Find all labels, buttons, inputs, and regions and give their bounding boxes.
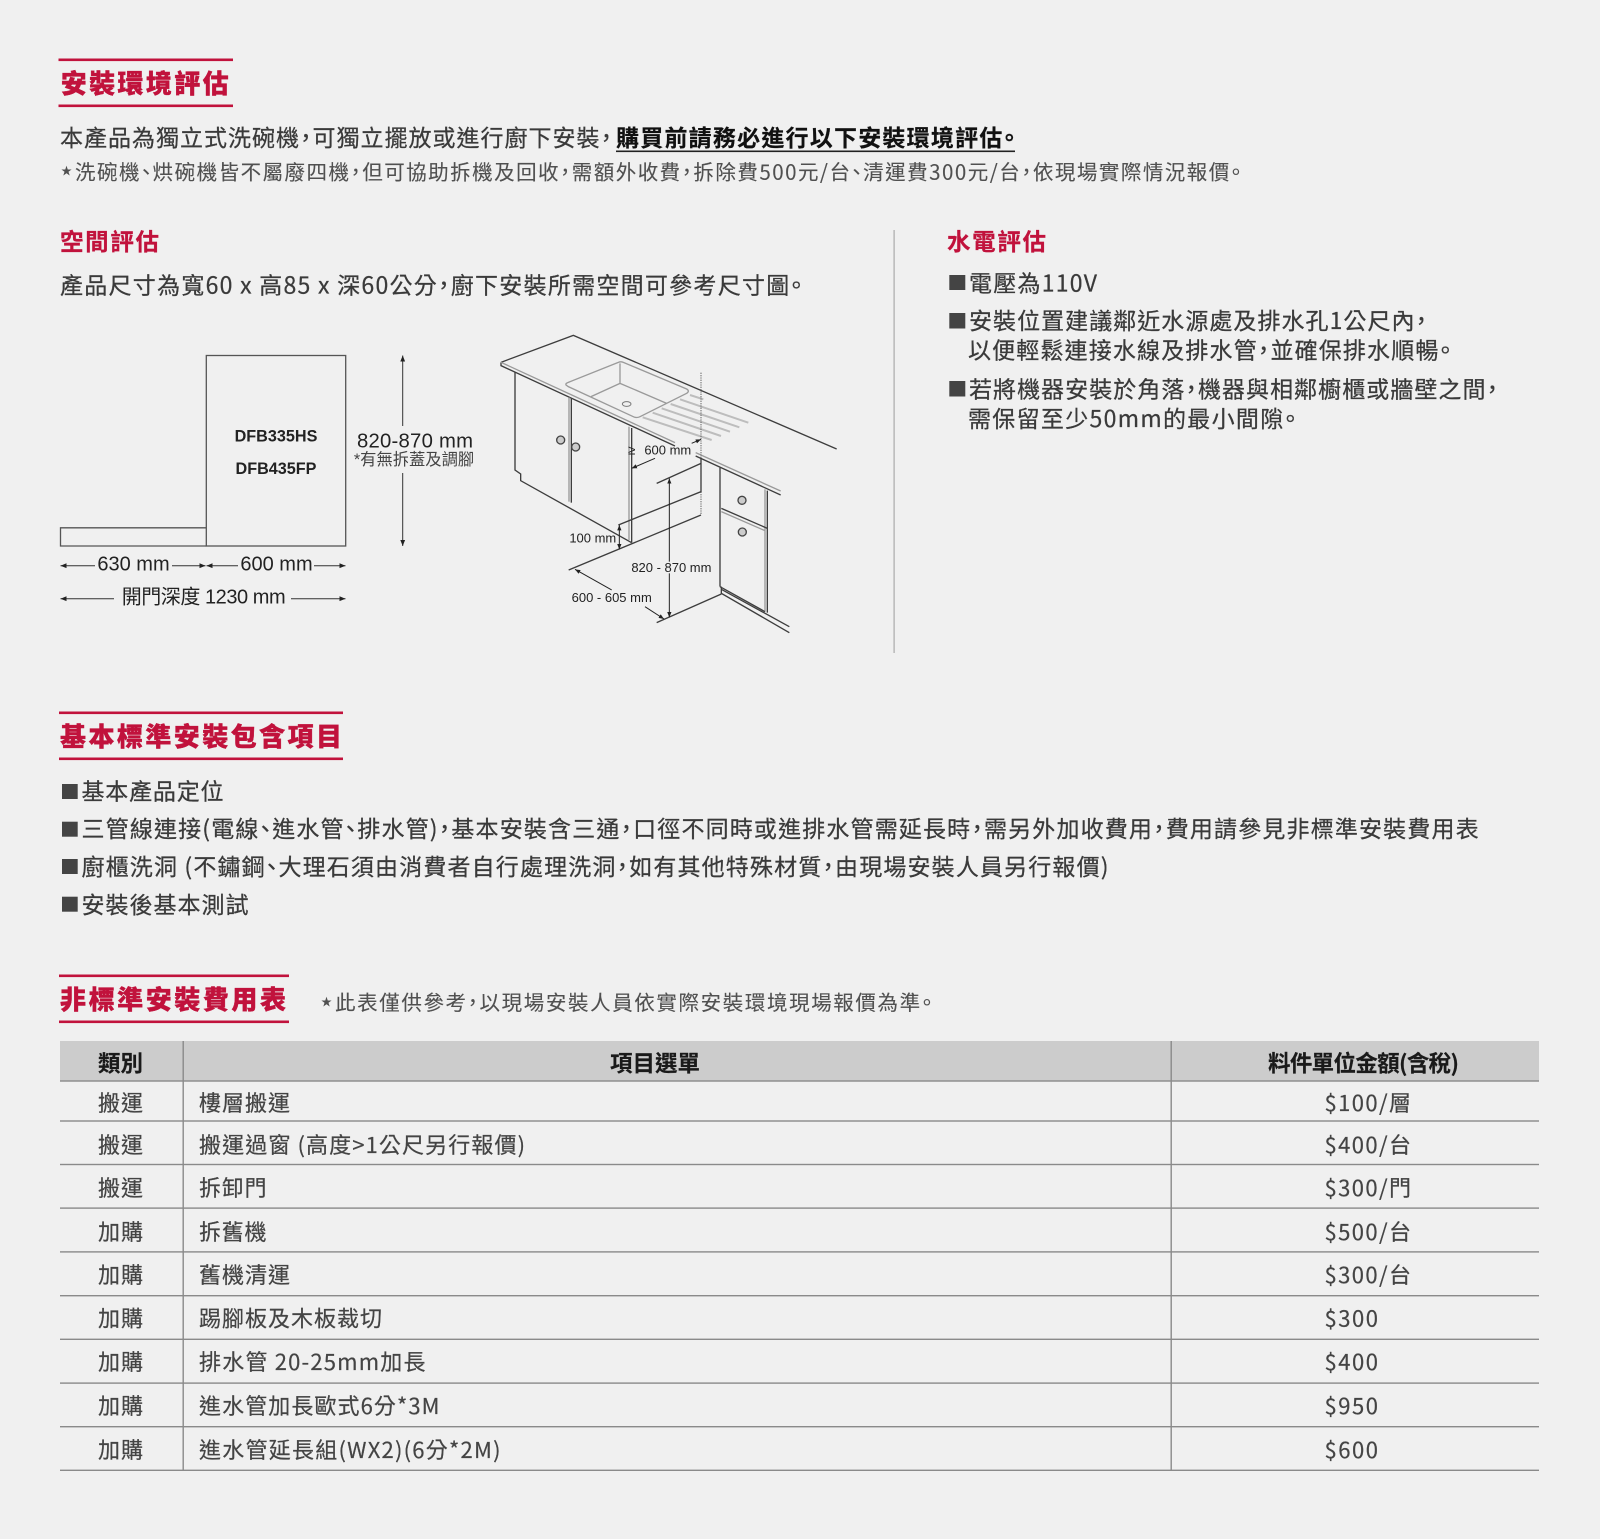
- panel: water and power assessment: [894, 223, 1498, 653]
- heading: space assessment: 空間評估: [60, 223, 159, 257]
- row: door removal: $300/門: [1324, 1171, 1411, 1203]
- row: door removal: 搬運: [98, 1171, 143, 1203]
- row: remove old machine: $500/台: [1324, 1215, 1411, 1247]
- row: window carrying: $400/台: [1324, 1128, 1411, 1160]
- row: remove old machine: 加購: [98, 1215, 143, 1247]
- item: cabinet hole cutting: 廚櫃洗洞 (不鏽鋼、大理石須由消費者自行處理洗洞，如有其他特殊材質，由現場安裝人員另行報價): [82, 848, 1108, 882]
- panel: space assessment: [60, 223, 837, 633]
- diagram: under-counter isometric cabinet: 820 - 870 mm: [631, 560, 711, 575]
- panel: installation environment intro: [58, 58, 1241, 186]
- row: window carrying: [98, 1128, 1411, 1160]
- row: floor carrying: 搬運: [98, 1086, 143, 1118]
- intro text: 本產品為獨立式洗碗機，可獨立擺放或進行廚下安裝，: [60, 119, 612, 153]
- water source distance item: 以便輕鬆連接水線及排水管，並確保排水順暢。: [968, 332, 1451, 366]
- panel: basic standard installation: [59, 712, 1479, 920]
- row: drain pipe extension: 排水管 20-25mm加長: [199, 1345, 426, 1377]
- diagram: front clearance dimensions: 開門深度 1230 mm: [122, 586, 286, 608]
- row: old machine disposal: [98, 1258, 1411, 1290]
- table note: 此表僅供參考，以現場安裝人員依實際安裝環境現場報價為準。: [335, 986, 932, 1016]
- row: kick plate cutting: [98, 1302, 1378, 1334]
- item: three line connection: 三管線連接(電線、進水管、排水管)，基本安裝含三通，口徑不同時或進排水管需延長時，需另外加收費用，費用請參見非標準安裝費用表: [82, 810, 1479, 844]
- corner clearance item: 若將機器安裝於角落，機器與相鄰櫥櫃或牆壁之間，: [969, 370, 1498, 404]
- table header row: 類別: [98, 1046, 143, 1078]
- water source distance item: [949, 302, 1451, 366]
- heading: non-standard installation fees: 非標準安裝費用表: [60, 980, 286, 1017]
- row: old machine disposal: 舊機清運: [199, 1258, 290, 1290]
- row: inlet pipe extension set: [98, 1433, 1378, 1465]
- row: drain pipe extension: 加購: [98, 1345, 143, 1377]
- row: inlet pipe extension set: 進水管延長組(WX2)(6分*2M): [199, 1433, 500, 1465]
- table grid lines: [60, 1041, 1539, 1471]
- row: kick plate cutting: $300: [1324, 1302, 1378, 1334]
- row: window carrying: 搬運: [98, 1128, 143, 1160]
- row: drain pipe extension: $400: [1324, 1345, 1378, 1377]
- diagram: front clearance dimensions: *有無拆蓋及調腳: [354, 451, 474, 469]
- diagram: under-counter isometric cabinet: 100 mm: [569, 530, 616, 545]
- heading: basic standard installation items: 基本標準安裝包含項目: [60, 717, 342, 754]
- row: inlet pipe extension: $950: [1324, 1389, 1378, 1421]
- row: drain pipe extension: [98, 1345, 1378, 1377]
- diagram: front clearance dimensions: [60, 356, 474, 608]
- divider between panels: [894, 230, 895, 653]
- item: product positioning: 基本產品定位: [82, 773, 224, 807]
- footnote on recycling fees: ★: [61, 162, 72, 178]
- table header row: 料件單位金額(含稅): [1268, 1046, 1459, 1078]
- table header row: 項目選單: [610, 1046, 700, 1078]
- row: door removal: 拆卸門: [199, 1171, 266, 1203]
- heading: installation environment assessment: 安裝環境評估: [61, 64, 229, 101]
- row: remove old machine: [98, 1215, 1411, 1247]
- row: floor carrying: [98, 1086, 1411, 1118]
- product size text: 產品尺寸為寬60 x 高85 x 深60公分，廚下安裝所需空間可參考尺寸圖。: [60, 266, 802, 300]
- fee table: [60, 1041, 1539, 1471]
- row: remove old machine: 拆舊機: [199, 1215, 266, 1247]
- water source distance item: 安裝位置建議鄰近水源處及排水孔1公尺內，: [969, 302, 1427, 336]
- footnote on recycling fees: 洗碗機、烘碗機皆不屬廢四機，但可協助拆機及回收，需額外收費，拆除費500元/台、清運費300元/台，依現場實際情況報價。: [75, 156, 1241, 186]
- row: kick plate cutting: 加購: [98, 1302, 143, 1334]
- row: window carrying: 搬運過窗 (高度>1公尺另行報價): [199, 1128, 525, 1160]
- table header row: [60, 1041, 1539, 1081]
- row: inlet pipe extension set: 加購: [98, 1433, 143, 1465]
- diagram: under-counter isometric cabinet: [501, 335, 837, 633]
- voltage item: 電壓為110V: [969, 264, 1098, 298]
- row: door removal: [98, 1171, 1411, 1203]
- intro emphasised text with underline: 購買前請務必進行以下安裝環境評估。: [616, 119, 1015, 153]
- table note: ★: [321, 994, 332, 1010]
- diagram: front clearance dimensions: 600 mm: [240, 553, 313, 575]
- corner clearance item: [949, 370, 1498, 434]
- row: inlet pipe extension: [98, 1389, 1378, 1421]
- row: old machine disposal: 加購: [98, 1258, 143, 1290]
- item: post-installation test: 安裝後基本測試: [82, 886, 248, 920]
- row: inlet pipe extension: 進水管加長歐式6分*3M: [199, 1389, 440, 1421]
- diagram: front clearance dimensions: 630 mm: [97, 553, 170, 575]
- panel: non-standard installation fee table: [59, 974, 1539, 1471]
- diagram: under-counter isometric cabinet: 600 - 605 mm: [572, 590, 652, 605]
- row: inlet pipe extension set: $600: [1324, 1433, 1378, 1465]
- row: floor carrying: $100/層: [1324, 1086, 1411, 1118]
- row: floor carrying: 樓層搬運: [199, 1086, 290, 1118]
- diagram: under-counter isometric cabinet: ≥: [628, 442, 635, 457]
- corner clearance item: 需保留至少50mm的最小間隙。: [968, 400, 1296, 434]
- diagram: under-counter isometric cabinet: 600 mm: [644, 442, 691, 457]
- row: inlet pipe extension: 加購: [98, 1389, 143, 1421]
- heading: water and power assessment: 水電評估: [947, 223, 1046, 257]
- diagram: front clearance dimensions: DFB435FP: [236, 460, 317, 478]
- row: kick plate cutting: 踢腳板及木板裁切: [199, 1302, 382, 1334]
- diagram: front clearance dimensions: 820-870 mm: [357, 430, 473, 452]
- row: old machine disposal: $300/台: [1324, 1258, 1411, 1290]
- diagram: front clearance dimensions: DFB335HS: [235, 428, 318, 446]
